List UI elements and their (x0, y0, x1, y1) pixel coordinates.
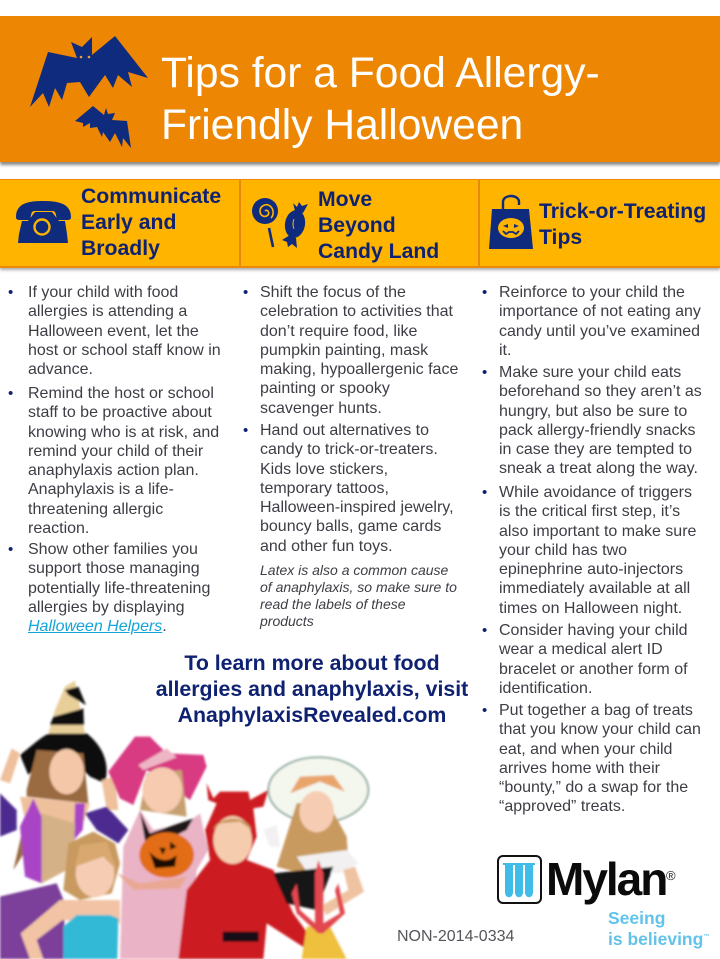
bullet 3: Halloween Helpers. (28, 618, 167, 635)
call to action: To learn more about food (184, 651, 440, 675)
bullet 5: eat, and when your child (499, 741, 672, 758)
bullet 3: • (8, 541, 13, 558)
bullet 4: Consider having your child (499, 622, 688, 639)
bullet 1: If your child with food (28, 284, 178, 301)
registered mark: ® (666, 868, 676, 883)
column 3 text (482, 284, 702, 815)
bullet 1: don’t require food, like (260, 323, 417, 340)
latex note: products (260, 613, 314, 629)
heading: move beyond: Candy Land (318, 240, 439, 263)
tagline: Seeing (608, 908, 665, 928)
bullet 1: advance. (28, 361, 93, 378)
bullet 2: Kids love stickers, (260, 461, 388, 478)
bullet 5: Put together a bag of treats (499, 702, 693, 719)
bullet 2: Halloween-inspired jewelry, (260, 499, 454, 516)
latex note: of anaphylaxis, so make sure to (260, 579, 457, 595)
latex note: read the labels of these (260, 596, 406, 612)
latex note (260, 562, 457, 629)
bullet 2: remind your child of their (28, 443, 203, 460)
photo: children in halloween costumes (0, 680, 371, 959)
bullet 2: • (243, 422, 248, 439)
bullet 3: • (482, 484, 487, 501)
call to action (156, 651, 468, 727)
heading: trick or treating (539, 200, 706, 249)
divider cells (239, 180, 240, 267)
heading: trick or treating: Tips (539, 226, 582, 249)
latex note: Latex is also a common cause (260, 562, 448, 578)
bullet 4 (482, 622, 688, 697)
bullet 1: Shift the focus of the (260, 284, 406, 301)
bullet 3: your child has two (499, 542, 627, 559)
heading: move beyond (318, 188, 439, 263)
bullet 3: While avoidance of triggers (499, 484, 692, 501)
heading: move beyond: Beyond (318, 214, 396, 237)
bullet 3: support those managing (28, 560, 200, 577)
witch dress (0, 883, 63, 959)
column header band (0, 179, 720, 268)
bullet 1: Reinforce to your child the (499, 284, 685, 301)
pink witch (108, 737, 207, 805)
bullet 5: arrives home with their (499, 760, 660, 777)
call to action: allergies and anaphylaxis, visit (156, 677, 468, 701)
header banner (0, 16, 720, 162)
heading: communicate: Communicate (81, 185, 221, 208)
bullet 3: immediately available at all (499, 580, 690, 597)
column 2 text (243, 284, 458, 629)
bullet 2: anaphylaxis action plan. (28, 462, 199, 479)
bullet 1: painting or spooky (260, 380, 390, 397)
bullet 3: times on Halloween night. (499, 600, 682, 617)
bullet 1 (243, 284, 458, 417)
bullet 2: threatening allergic (28, 501, 163, 518)
bullet 1 (482, 284, 701, 359)
bullet 2: • (482, 364, 487, 381)
bullet 1: it. (499, 342, 511, 359)
bullet 3: also important to make sure (499, 523, 696, 540)
bullet 2: candy to trick-or-treaters. (260, 441, 438, 458)
bullet 1: pumpkin painting, mask (260, 342, 428, 359)
bullet 3: Show other families you (28, 541, 198, 558)
bullet 1: Halloween event, let the (28, 323, 199, 340)
icon: bats (30, 36, 148, 148)
bullet 1: • (482, 284, 487, 301)
heading: communicate (81, 185, 221, 260)
bullet 2: and other fun toys. (260, 538, 393, 555)
title: Tips for a Food Allergy- (161, 49, 600, 97)
bullet 1: importance of not eating any (499, 303, 701, 320)
bullet 2: Remind the host or school (28, 385, 214, 402)
bullet 2: reaction. (28, 520, 89, 537)
bullet 1: candy until you’ve examined (499, 323, 700, 340)
bullet 1: celebration to activities that (260, 303, 453, 320)
bullet 4: wear a medical alert ID (499, 641, 663, 658)
pumpkin (139, 832, 194, 878)
small girl (63, 832, 120, 900)
devil (178, 783, 315, 959)
bullet 2: Hand out alternatives to (260, 422, 429, 439)
bullet 2: staff to be proactive about (28, 404, 212, 421)
bullet 4: identification. (499, 680, 592, 697)
document code: NON-2014-0334 (397, 928, 514, 945)
title: Friendly Halloween (161, 101, 523, 149)
bullet 1: • (243, 284, 248, 301)
bullet 3: is the critical first step, it’s (499, 503, 680, 520)
bullet 1 (8, 284, 221, 378)
tagline (608, 908, 709, 949)
bullet 2: beforehand so they aren’t as (499, 383, 702, 400)
tagline: is believing™ (608, 929, 709, 949)
heading: communicate: Broadly (81, 237, 160, 260)
bullet 2: Make sure your child eats (499, 364, 681, 381)
heading: move beyond: Move (318, 188, 372, 211)
title (161, 49, 600, 149)
bullet 4: • (482, 622, 487, 639)
bullet 4: bracelet or another form of (499, 661, 688, 678)
bullet 5: • (482, 702, 487, 719)
call to action: AnaphylaxisRevealed.com (178, 703, 446, 727)
bullet 1: • (8, 284, 13, 301)
bullet 5 (482, 702, 701, 815)
bullet 5: “bounty,” do a swap for the (499, 779, 688, 796)
icon: treat bag (489, 194, 533, 249)
icon: lollipop and candy (252, 198, 308, 248)
heading: trick or treating: Trick-or-Treating (539, 200, 706, 223)
bullet 1: making, hypoallergenic face (260, 361, 458, 378)
bullet 2: sneak a treat along the way. (499, 460, 698, 477)
bullet 1: allergies is attending a (28, 303, 187, 320)
bullet 1: host or school staff know in (28, 342, 221, 359)
wordmark: Mylan (546, 853, 666, 905)
bullet 2: • (8, 385, 13, 402)
heading: communicate: Early and (81, 211, 176, 234)
bullet 3: potentially life-threatening (28, 580, 210, 597)
bullet 2 (8, 385, 219, 537)
icon: telephone (16, 201, 71, 243)
bullet 2 (482, 364, 702, 477)
bullet 3 (8, 541, 210, 635)
bullet 3 (482, 484, 696, 617)
bullet 2: in case they are tempted to (499, 441, 692, 458)
bullet 2: Anaphylaxis is a life- (28, 481, 174, 498)
bullet 3: epinephrine auto-injectors (499, 561, 683, 578)
bullet 2: bouncy balls, game cards (260, 518, 441, 535)
icon: test tubes (497, 855, 542, 904)
bullet 5: “approved” treats. (499, 798, 625, 815)
bullet 3: allergies by displaying (28, 599, 185, 616)
column 1 text (8, 284, 221, 635)
bullet 2: knowing who is at risk, and (28, 424, 219, 441)
bullet 2: hungry, but also be sure to (499, 403, 687, 420)
logo: mylan (497, 853, 709, 949)
bullet 5: that you know your child can (499, 721, 701, 738)
right girl (268, 757, 368, 823)
bullet 2 (243, 422, 454, 555)
bullet 1: scavenger hunts. (260, 400, 382, 417)
bullet 2: temporary tattoos, (260, 480, 389, 497)
bullet 2: pack allergy-friendly snacks (499, 422, 696, 439)
